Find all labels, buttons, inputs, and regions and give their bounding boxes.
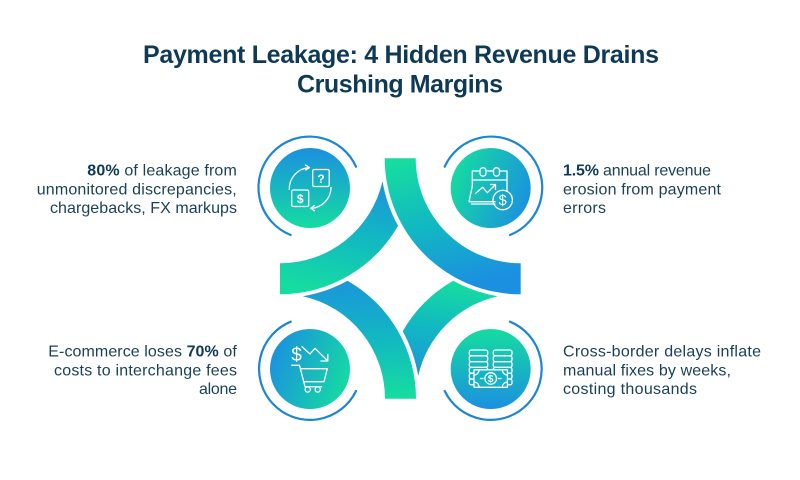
text: E-commerce loses 70%: E-commerce loses 70% of xyxy=(48,344,237,361)
title xyxy=(143,41,659,98)
text: Cross-border delays: manual fixes by weeks, xyxy=(563,362,731,379)
icon: coin stacks and banknote: $ xyxy=(488,374,494,385)
icon: exchange unknown and dollar xyxy=(258,137,356,235)
text: 1.5% annual revenue: 1.5% annual revenue xyxy=(563,163,711,180)
icon: calendar with chart and dollar: $ xyxy=(499,193,507,209)
text: E-commerce loses 70%: alone xyxy=(199,381,237,398)
panel: cross-border delays xyxy=(445,322,761,420)
panel: e-commerce interchange fees xyxy=(48,322,356,420)
text: 1.5% annual revenue: erosion from payment xyxy=(563,182,722,198)
text: E-commerce loses 70%: costs to interchange fees xyxy=(54,362,237,379)
text: 1.5% annual revenue xyxy=(563,163,722,217)
panel: annual revenue erosion xyxy=(445,137,722,235)
icon: exchange unknown and dollar: ? xyxy=(317,172,325,186)
text: E-commerce loses 70% xyxy=(48,344,237,398)
icon: exchange unknown and dollar: $ xyxy=(297,192,304,206)
text: 1.5% annual revenue: errors xyxy=(563,200,606,217)
text: 80% of leakage: chargebacks, FX markups xyxy=(50,200,237,217)
text: 80% of leakage xyxy=(37,163,237,217)
title: Payment Leakage: 4 Hidden Revenue Drains xyxy=(143,41,659,69)
text: 80% of leakage: 80% of leakage from xyxy=(87,163,237,180)
title: Crushing Margins xyxy=(297,70,503,98)
central four-arc star xyxy=(280,158,521,399)
text: 80% of leakage: unmonitored discrepancies, xyxy=(37,182,237,198)
icon: calendar with chart and dollar xyxy=(445,137,542,235)
text: Cross-border delays xyxy=(563,344,761,398)
icon: coin stacks and banknote xyxy=(445,322,542,420)
text: Cross-border delays: costing thousands xyxy=(563,381,697,398)
icon: shopping cart with falling dollar: $ xyxy=(291,345,302,366)
text: Cross-border delays: Cross-border delays inflate xyxy=(563,344,761,361)
panel: unmonitored discrepancies xyxy=(37,137,356,235)
icon: shopping cart with falling dollar xyxy=(259,322,356,420)
